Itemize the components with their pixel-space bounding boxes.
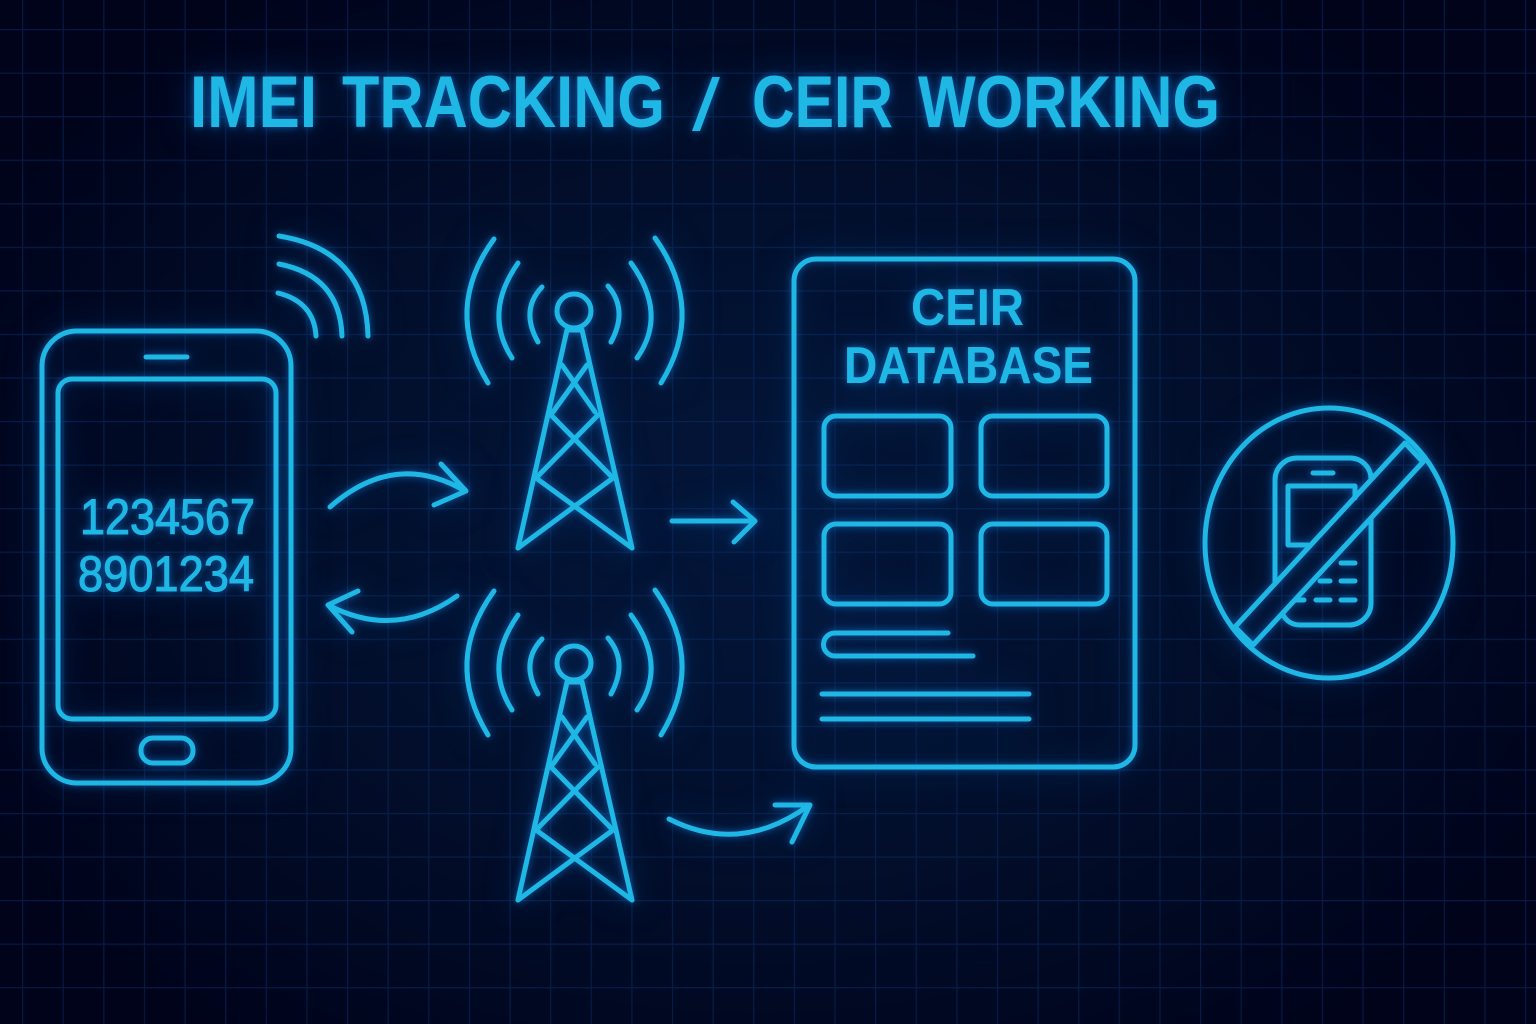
- title: IMEI: [190, 62, 317, 143]
- IMEI number: [78, 489, 255, 602]
- database text lines: [822, 633, 1029, 719]
- arrow: tower to phone: [328, 591, 457, 632]
- title: CEIR: [752, 62, 893, 143]
- phone speaker: [146, 354, 187, 360]
- prohibition slash: [1235, 443, 1423, 645]
- title: TRACKING: [342, 62, 665, 143]
- prohibition circle: [1205, 408, 1453, 678]
- IMEI number: 1234567: [80, 489, 255, 545]
- database outline: [794, 259, 1135, 767]
- arrow: upper tower to database: [672, 502, 755, 542]
- database heading: DATABASE: [844, 337, 1093, 395]
- title: /: [692, 65, 721, 146]
- phone body: [42, 331, 291, 783]
- arrow: lower tower to database: [669, 805, 810, 842]
- database heading: CEIR: [911, 279, 1024, 337]
- icon: lower cell tower: [467, 590, 682, 900]
- title: WORKING: [918, 62, 1220, 143]
- title: [190, 62, 1220, 146]
- phone screen: [58, 379, 276, 719]
- IMEI number: 8901234: [78, 546, 254, 602]
- blocked phone body: [1275, 458, 1371, 625]
- panel: CEIR database: [794, 259, 1135, 767]
- database record cells: [824, 416, 1107, 604]
- database heading: [844, 279, 1093, 395]
- icon: upper cell tower: [467, 238, 682, 548]
- arrow: phone to tower: [330, 464, 466, 507]
- icon: smartphone showing IMEI number: [42, 331, 291, 783]
- icon: phone wireless signal: [278, 236, 368, 336]
- icon: blocked phone: [1205, 408, 1453, 678]
- phone home button: [141, 738, 193, 763]
